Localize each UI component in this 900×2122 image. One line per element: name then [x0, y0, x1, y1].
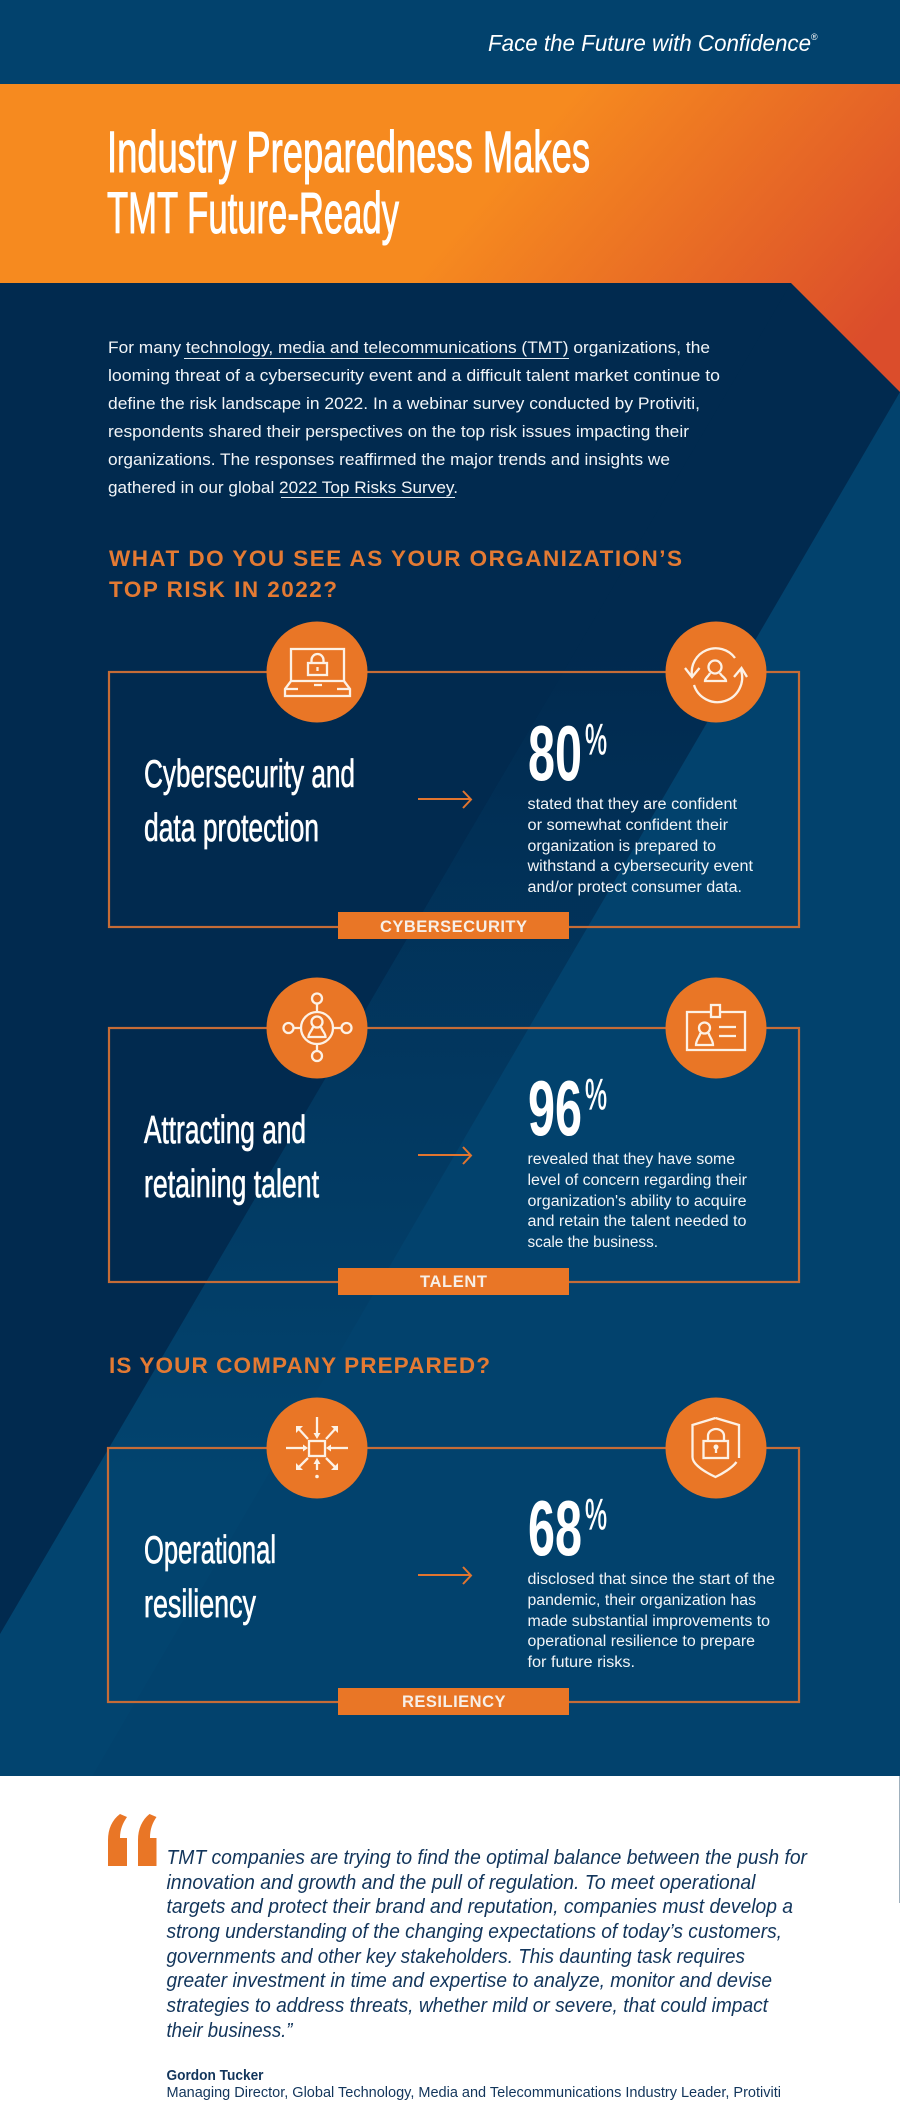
panel: quote section: [0, 1776, 900, 2122]
icon: person network: [266, 978, 368, 1078]
risk title: Operational: [144, 1529, 276, 1572]
header band: [0, 0, 900, 84]
intro paragraph: organizations. The responses reaffirmed the major trends and insights we: [108, 450, 670, 469]
title banner: [0, 84, 900, 392]
stat: 96%: %: [585, 1070, 607, 1119]
tagline: Face the Future with Confidence: [488, 30, 811, 56]
stat description: pandemic, their organization has: [528, 1592, 756, 1609]
stat description: operational resilience to prepare: [528, 1633, 755, 1650]
icon: converging arrows: [266, 1398, 368, 1498]
attribution: [166, 2067, 781, 2101]
title: Industry Preparedness Makes: [107, 120, 590, 185]
quote text: TMT companies are trying to find the optimal balance between the push for: [166, 1847, 808, 1869]
risk title: [144, 1529, 276, 1626]
quote text: greater investment in time and expertise to analyze, monitor and devise: [166, 1970, 772, 1992]
title: [107, 120, 590, 246]
registered mark: ®: [811, 32, 818, 42]
stat description: and retain the talent needed to: [528, 1213, 746, 1230]
intro paragraph: [108, 338, 720, 498]
stat description: for future risks.: [528, 1654, 635, 1671]
stat description: [528, 1151, 747, 1251]
arrow: [418, 791, 471, 808]
panel: resiliency: [108, 1398, 799, 1715]
intro paragraph: gathered in our global 2022 Top Risks Survey.: [108, 478, 458, 497]
quote text: their business.”: [166, 2020, 294, 2042]
stat description: organization's ability to acquire: [528, 1193, 746, 1210]
heading: top risk question: TOP RISK IN 2022?: [109, 577, 337, 602]
icon: laptop with lock: [266, 622, 368, 722]
quote text: targets and protect their brand and reputation, companies must develop a: [166, 1896, 793, 1918]
stat: 96%: 96: [528, 1064, 582, 1152]
stat: 68%: 68: [528, 1484, 582, 1572]
icon: person with rotating arrows: [666, 622, 766, 722]
stat description: withstand a cybersecurity event: [526, 858, 754, 875]
icon: quotation mark: [108, 1814, 156, 1866]
stat description: and/or protect consumer data.: [528, 879, 742, 896]
stat description: [526, 796, 754, 896]
intro paragraph: define the risk landscape in 2022. In a webinar survey conducted by Protiviti,: [108, 394, 700, 413]
tag: [338, 912, 569, 939]
icon: ID badge: [666, 978, 766, 1078]
stat description: [528, 1571, 775, 1671]
stat description: or somewhat confident their: [528, 817, 728, 834]
panel: talent: [109, 978, 799, 1295]
tag: TALENT: [420, 1273, 487, 1291]
risk title: retaining talent: [144, 1163, 319, 1206]
tag: CYBERSECURITY: [380, 918, 527, 936]
quote text: strategies to address threats, whether mild or severe, that could impact: [166, 1995, 769, 2017]
intro paragraph: looming threat of a cybersecurity event and a difficult talent market continue to: [108, 366, 720, 385]
risk title: [144, 1109, 319, 1206]
attribution: Managing Director, Global Technology, Media and Telecommunications Industry Leader, Protiviti: [166, 2084, 781, 2101]
quote text: governments and other key stakeholders. This daunting task requires: [166, 1946, 745, 1968]
heading: preparedness question: IS YOUR COMPANY PREPARED?: [109, 1353, 490, 1378]
panel: cybersecurity: [109, 622, 799, 939]
stat description: organization is prepared to: [528, 838, 716, 855]
intro paragraph: For many technology, media and telecommunications (TMT) organizations, the: [108, 338, 710, 357]
tag: RESILIENCY: [402, 1693, 506, 1711]
arrow: [418, 1567, 471, 1584]
stat description: made substantial improvements to: [528, 1613, 770, 1630]
risk title: Cybersecurity and: [144, 753, 355, 796]
quote text: strong understanding of the changing expectations of today’s customers,: [166, 1921, 782, 1943]
stat description: revealed that they have some: [528, 1151, 735, 1168]
risk title: Attracting and: [144, 1109, 306, 1152]
arrow: [418, 1147, 471, 1164]
stat: 68%: %: [585, 1490, 607, 1539]
risk title: data protection: [144, 807, 319, 850]
icon: shield with lock: [666, 1398, 766, 1498]
stat: 80%: %: [585, 715, 607, 764]
stat description: scale the business.: [528, 1234, 658, 1251]
quote text: [166, 1847, 808, 2042]
stat: 80%: 80: [528, 709, 582, 797]
stat description: level of concern regarding their: [528, 1172, 747, 1189]
stat description: disclosed that since the start of the: [528, 1571, 775, 1588]
heading: top risk question: [109, 546, 682, 602]
attribution: Gordon Tucker: [166, 2067, 264, 2084]
stat description: stated that they are confident: [528, 796, 738, 813]
risk title: resiliency: [144, 1583, 256, 1626]
tag: [338, 1688, 569, 1715]
tag: [338, 1268, 569, 1295]
title: TMT Future-Ready: [107, 181, 399, 246]
intro paragraph: respondents shared their perspectives on the top risk issues impacting their: [108, 422, 689, 441]
heading: top risk question: WHAT DO YOU SEE AS YOUR ORGANIZATION’S: [109, 546, 682, 571]
quote text: innovation and growth and the pull of regulation. To meet operational: [166, 1872, 756, 1894]
risk title: [144, 753, 355, 850]
